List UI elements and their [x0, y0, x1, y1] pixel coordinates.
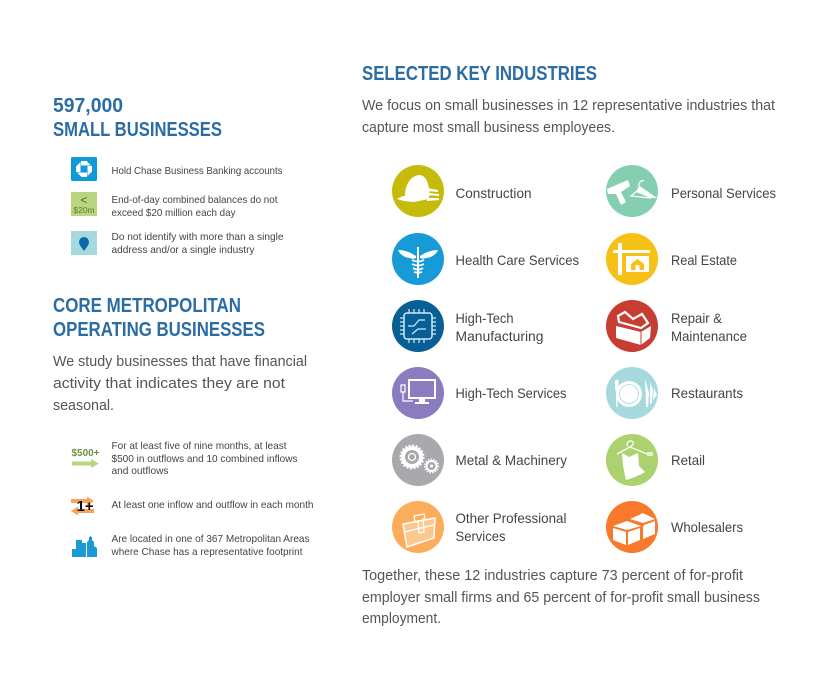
industry: high-tech services [392, 367, 566, 419]
industry: real estate [606, 233, 737, 285]
icon: shirt on hanger [606, 434, 658, 486]
icon: microchip [392, 300, 444, 352]
icon: Chase logo [71, 157, 97, 181]
industry: personal services [606, 165, 776, 217]
icon: boxes [606, 501, 658, 553]
heading: 597,000 small businesses: 597,000 [53, 95, 123, 117]
label: Metal & Machinery [456, 452, 567, 468]
industry: other professional services [392, 501, 566, 553]
label [456, 510, 566, 544]
icon: map pin [71, 231, 97, 255]
label: Real Estate [671, 252, 737, 268]
label: Restaurants [671, 385, 743, 401]
text: five of nine months: and outflows [112, 465, 168, 477]
paragraph: summary: Together, these 12 industries capture 73 percent of for-profit [362, 568, 743, 584]
paragraph: intro [362, 98, 775, 136]
paragraph: seasonal: seasonal. [53, 398, 114, 414]
label: Retail [671, 452, 705, 468]
text: five of nine months: $500 in outflows and 10 combined inflows [112, 453, 298, 465]
heading: 597,000 small businesses [53, 95, 222, 141]
label: High-Tech Services [456, 385, 566, 401]
text: metropolitan areas: where Chase has a representative footprint [111, 546, 303, 558]
label: Wholesalers [671, 519, 743, 535]
icon: caduceus [392, 233, 444, 285]
text: five of nine months [112, 440, 298, 477]
paragraph: summary: employer small firms and 65 percent of for-profit small business [362, 590, 760, 606]
icon: under $20m [71, 192, 97, 216]
criteria list: small businesses [71, 157, 284, 256]
text: one inflow: At least one inflow and outflow in each month [112, 499, 314, 511]
industry: health care services [392, 233, 579, 285]
label: Other Professional [456, 510, 566, 526]
icon: monitor [392, 367, 444, 419]
icon: 1+ arrows [71, 496, 94, 516]
paragraph: summary: employment. [362, 611, 441, 627]
heading: core metropolitan operating businesses: CORE METROPOLITAN [53, 295, 241, 317]
label: Maintenance [671, 328, 747, 344]
text: single address: Do not identify with more than a single [112, 231, 284, 243]
icon: house sign [606, 233, 658, 285]
icon: hair dryer and hanger [606, 165, 658, 217]
icon: $500+ arrow: $500+ [72, 448, 100, 459]
paragraph: seasonal [53, 354, 307, 414]
icon: plate and cutlery [606, 367, 658, 419]
text: five of nine months: For at least five of nine months, at least [112, 440, 287, 452]
label: Repair & [671, 310, 723, 326]
icon: hard hat [392, 165, 444, 217]
industry: wholesalers [606, 501, 743, 553]
industry: construction [392, 165, 532, 217]
icon: 1+ arrows: 1+ [76, 498, 94, 515]
label: Personal Services [671, 185, 776, 201]
text: hold accounts: Hold Chase Business Banking accounts [112, 165, 282, 177]
icon: toolbox [606, 300, 658, 352]
heading: 597,000 small businesses: SMALL BUSINESSES [53, 119, 222, 141]
label: Services [456, 528, 506, 544]
heading: selected key industries: SELECTED KEY INDUSTRIES [362, 63, 597, 85]
industry: metal & machinery [392, 434, 567, 486]
text: balances: End-of-day combined balances do not [112, 194, 278, 206]
paragraph: seasonal: We study businesses that have financial [53, 354, 307, 370]
icon: city skyline [72, 536, 97, 557]
text: balances [112, 194, 278, 219]
paragraph: summary [362, 568, 760, 627]
label: Health Care Services [456, 252, 579, 268]
industry: repair & maintenance [606, 300, 747, 352]
label: High-Tech [456, 310, 514, 326]
heading: core metropolitan operating businesses [53, 295, 265, 341]
text: single address: address and/or a single industry [112, 244, 255, 256]
heading: core metropolitan operating businesses: OPERATING BUSINESSES [53, 319, 265, 341]
text: balances: exceed $20 million each day [112, 207, 236, 219]
paragraph: intro: capture most small business employees. [362, 120, 615, 136]
paragraph: seasonal: activity that indicates they are not [53, 376, 285, 392]
label [671, 310, 747, 344]
paragraph: intro: We focus on small businesses in 12 representative industries that [362, 98, 775, 114]
label [456, 310, 544, 344]
text: single address [112, 231, 284, 256]
icon: briefcase [392, 501, 444, 553]
industry: retail [606, 434, 705, 486]
label: Manufacturing [456, 328, 544, 344]
criteria list: core businesses [71, 440, 314, 558]
text: metropolitan areas [111, 533, 309, 558]
label: Construction [456, 185, 532, 201]
industry: restaurants [606, 367, 743, 419]
icon: gears [392, 434, 444, 486]
icon: $500+ arrow [72, 448, 100, 468]
icon: under $20m: < [80, 193, 88, 207]
text: metropolitan areas: Are located in one of 367 Metropolitan Areas [112, 533, 310, 545]
icon: under $20m: $20m [73, 205, 95, 215]
industry: high-tech manufacturing [392, 300, 544, 352]
